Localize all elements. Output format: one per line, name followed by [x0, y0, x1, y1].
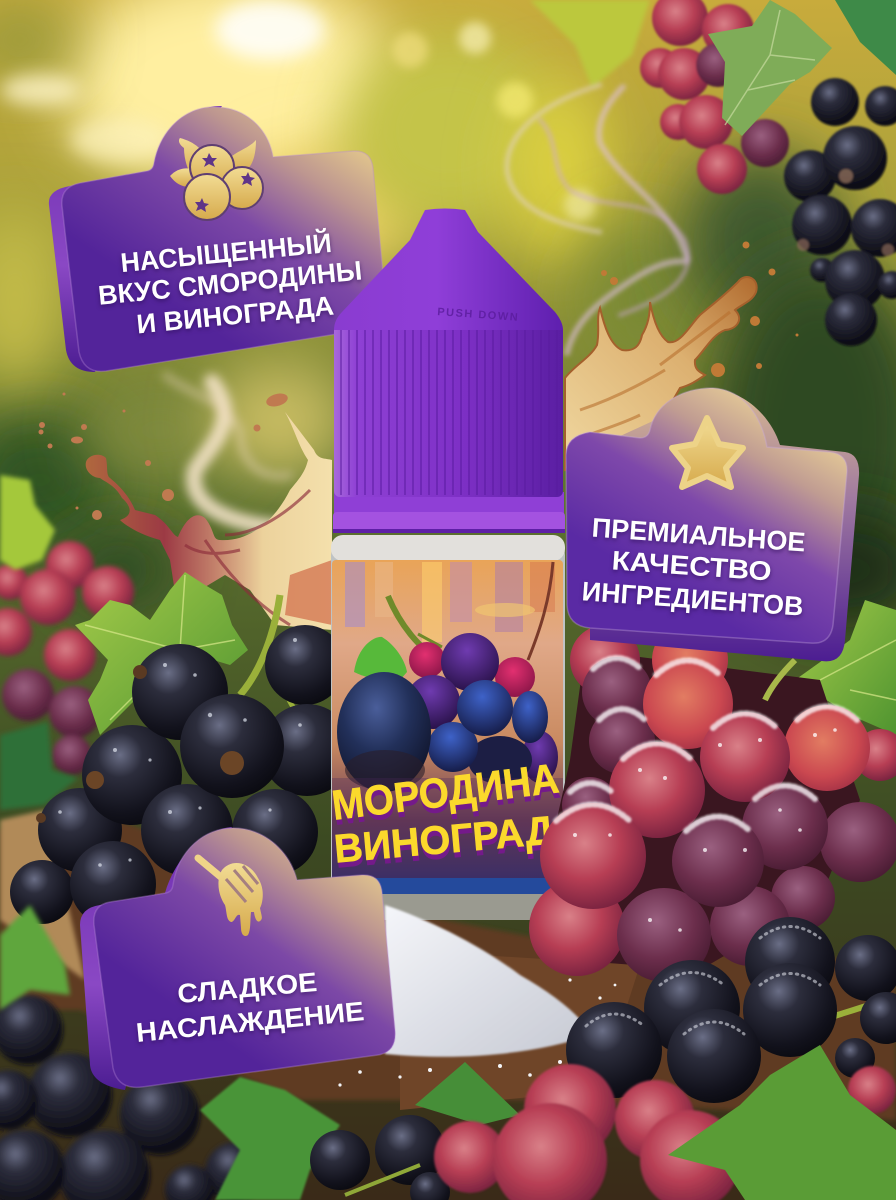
foreground black grapes, centre: [310, 1115, 450, 1200]
red grapes cluster, right: [529, 622, 896, 982]
juice splash, left: [38, 391, 332, 630]
product label: [329, 560, 563, 894]
panel side edge: [590, 390, 859, 661]
left background leaves: [0, 475, 78, 810]
panel text: ВКУС СМОРОДИНЫ: [97, 255, 363, 311]
panel side edge: [80, 827, 232, 1090]
panel text: [581, 513, 806, 622]
panel side edge: [49, 106, 222, 372]
foreground black grapes, bottom left: [0, 995, 265, 1200]
panel text: ПРЕМИАЛЬНОЕ: [591, 513, 806, 557]
icon: gold berries: [170, 138, 263, 220]
panel face: [566, 388, 847, 643]
leaves behind black currants: [75, 572, 896, 735]
foreground leaf left: [0, 905, 70, 1010]
label title: МОРОДИНА: [329, 754, 561, 829]
icon: gold star: [672, 418, 743, 487]
panel text: [97, 227, 363, 339]
foreground grapes, bottom: [0, 905, 896, 1200]
leaves, top right: [530, 0, 896, 136]
foreground leaf bottom centre-left: [200, 1077, 340, 1200]
foreground leaf bottom right: [668, 1045, 896, 1200]
sugar frost on grapes: [556, 658, 857, 831]
icon: honey dipper: [198, 858, 263, 936]
cap ribbed: [334, 325, 563, 497]
foreground leaf centre: [415, 1062, 520, 1125]
panel face: [94, 828, 395, 1087]
smoke wisps, right: [507, 85, 688, 353]
panel text: СЛАДКОЕ: [176, 967, 318, 1009]
wooden table: [0, 810, 896, 1120]
panel text: И ВИНОГРАДА: [135, 291, 335, 339]
label illustration: stem and leaf: [354, 596, 443, 680]
black currants cluster, left: [10, 625, 353, 927]
cap cone nozzle: PUSH DOWN: [437, 306, 520, 324]
panel text: КАЧЕСТВО: [611, 545, 772, 587]
smoke wisps, left: [165, 375, 290, 528]
panel: sweet pleasure: [80, 827, 395, 1090]
panel text: НАСЛАЖДЕНИЕ: [135, 996, 366, 1048]
black grapes, lower right: [566, 917, 896, 1103]
cap collar: [333, 492, 565, 533]
panel text: ИНГРЕДИЕНТОВ: [581, 576, 804, 622]
label title: [332, 764, 560, 868]
panel: rich flavour: [49, 106, 386, 372]
panel text: НАСЫЩЕННЫЙ: [119, 227, 333, 278]
panel: premium quality: [566, 388, 859, 661]
glass body: [331, 535, 565, 920]
red grapes, top right: [640, 0, 789, 194]
cap cone nozzle: [334, 208, 563, 330]
black grapes, top right: [784, 78, 896, 346]
label title: ВИНОГРАД: [332, 809, 555, 872]
sugar pile: [338, 905, 616, 1091]
bottle: [329, 208, 565, 920]
panel face: [62, 107, 386, 371]
blurred red grapes, left background: [0, 541, 134, 775]
panel text: [135, 967, 366, 1048]
foreground red grapes, bottom: [434, 1064, 896, 1200]
top-right grape bunches: [530, 0, 896, 346]
label illustration: berries: [337, 633, 558, 792]
juice splash, right: [565, 242, 798, 470]
